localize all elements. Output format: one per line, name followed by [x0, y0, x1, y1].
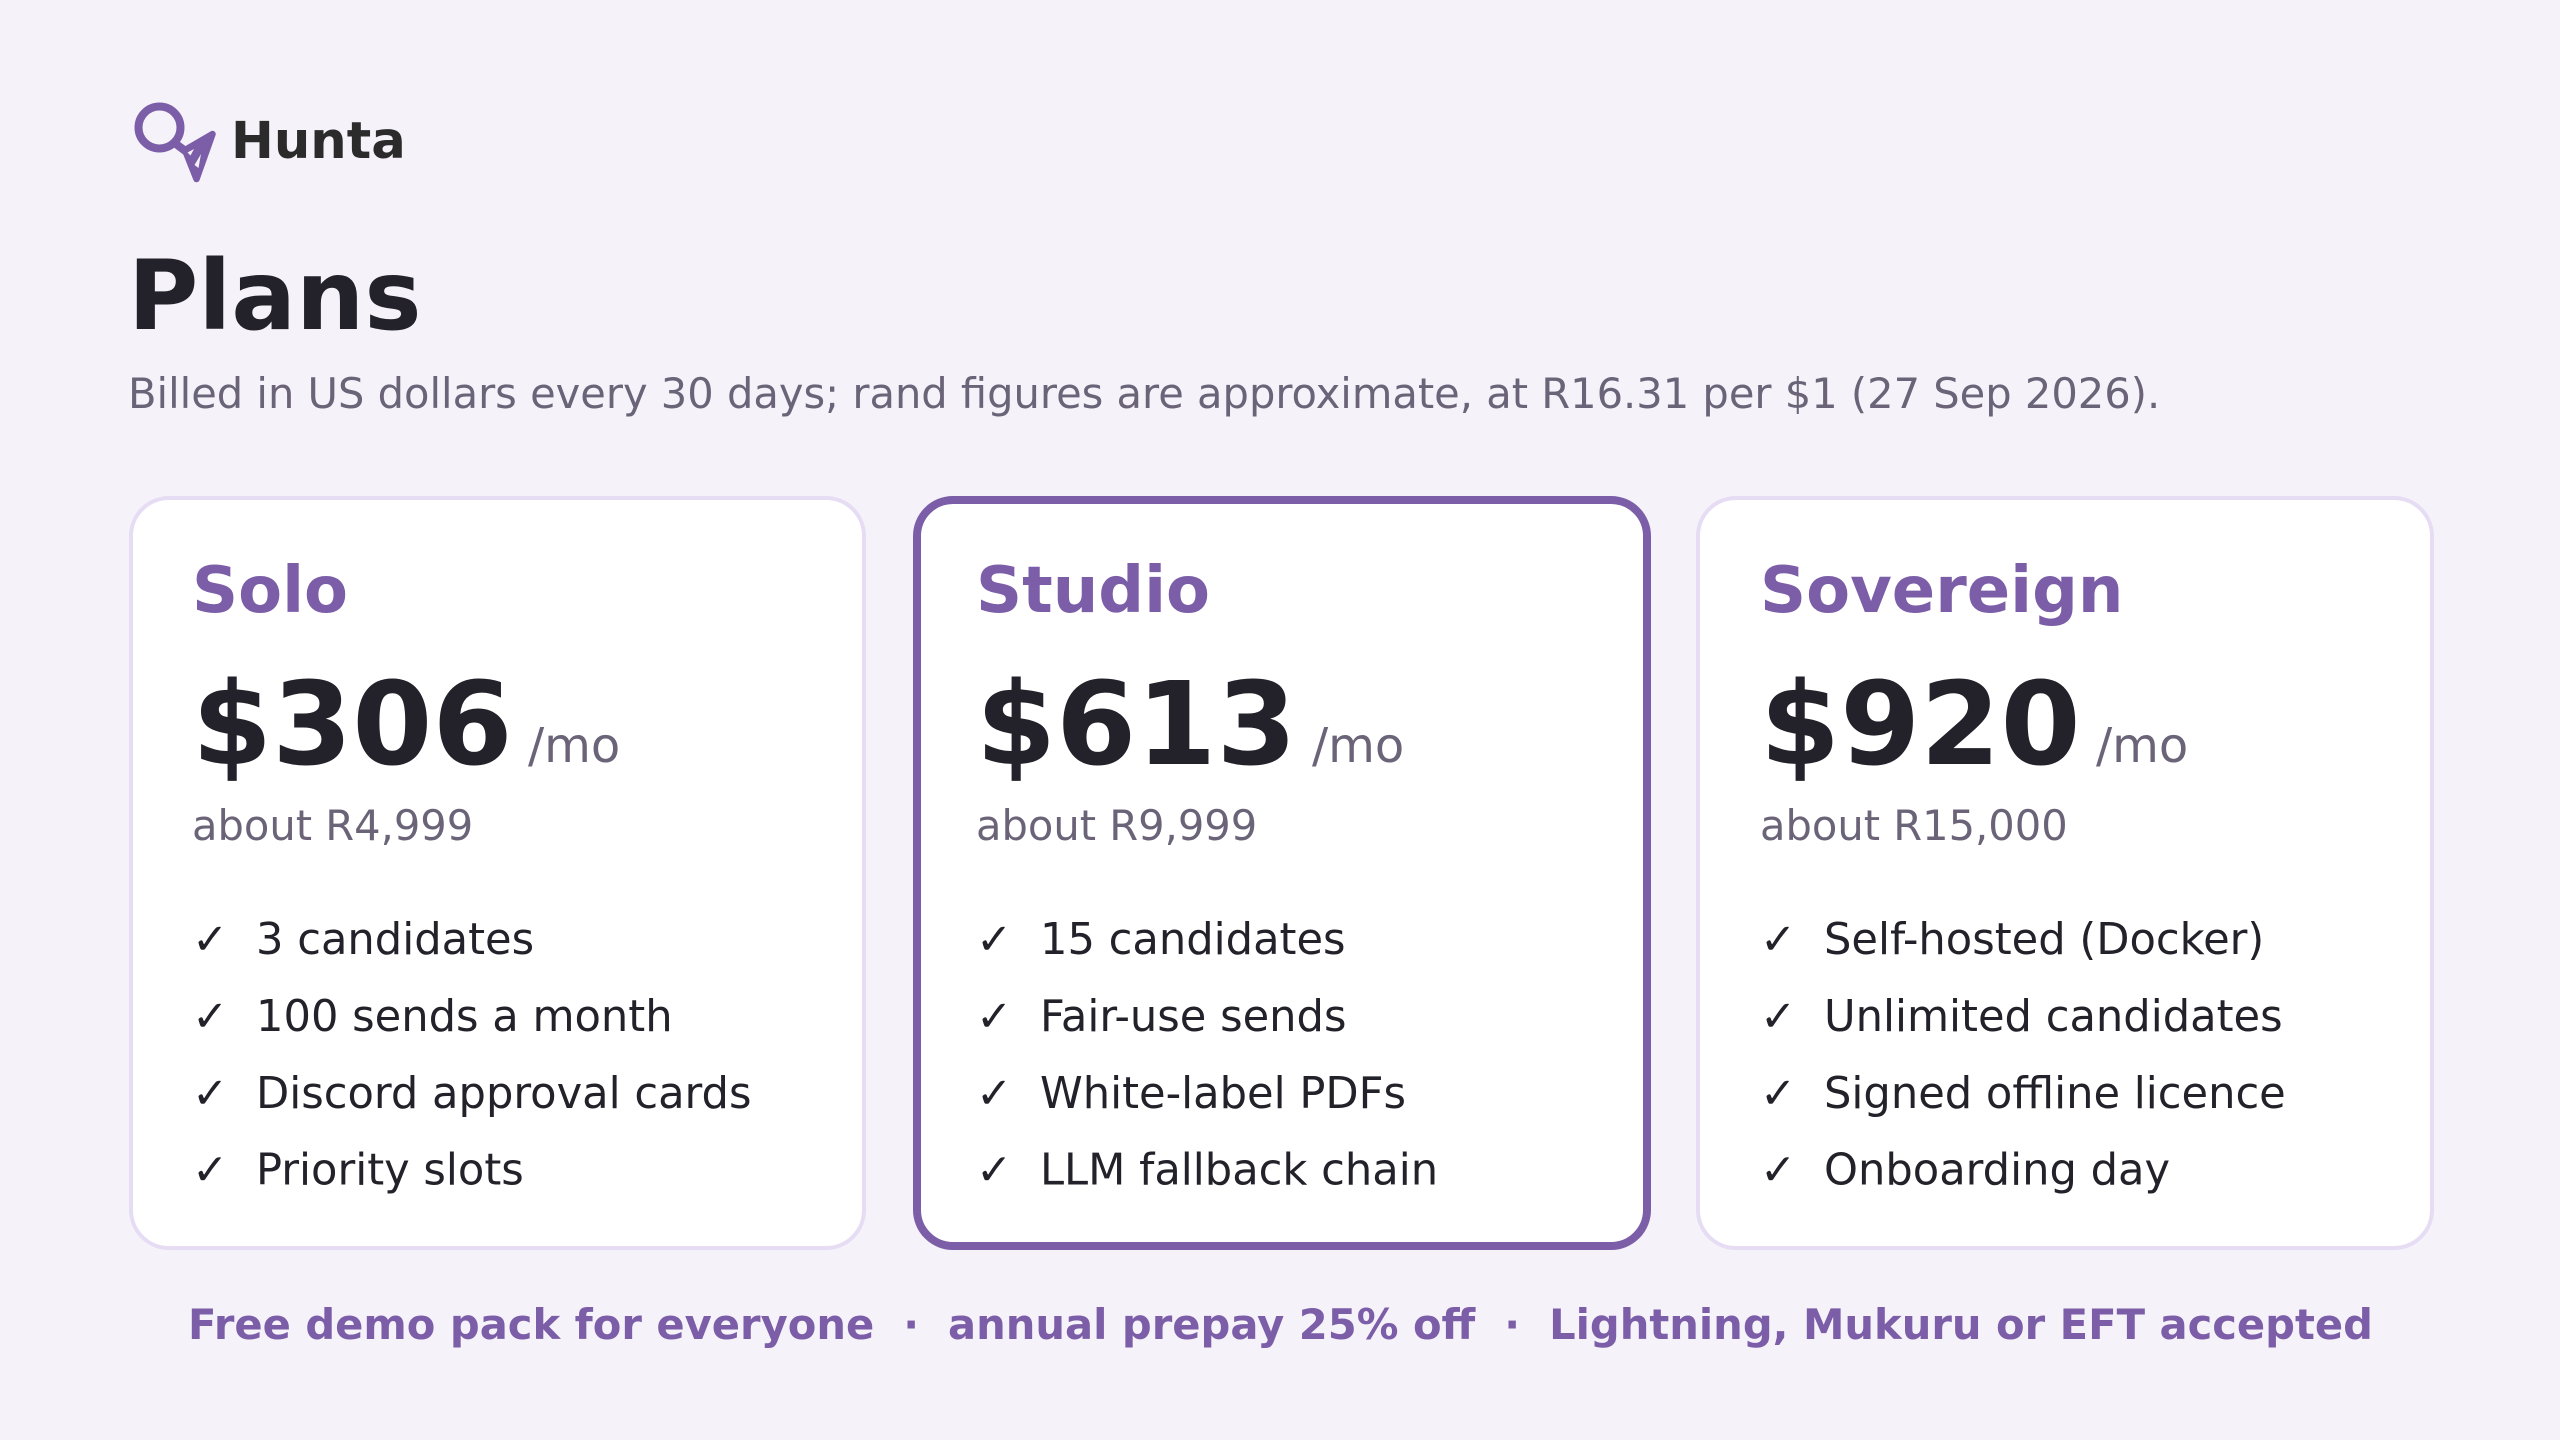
feature list: ✓	[1760, 915, 1796, 965]
panel: Studio plan (highlighted)	[917, 500, 1647, 1246]
feature list: Fair-use sends	[1040, 992, 1346, 1042]
feature list: Unlimited candidates	[1824, 992, 2283, 1042]
feature list: LLM fallback chain	[1040, 1146, 1438, 1196]
feature list: ✓	[1760, 992, 1796, 1042]
feature list	[192, 915, 751, 1196]
feature list: 3 candidates	[256, 915, 534, 965]
per month: /mo	[2096, 718, 2188, 774]
price: $613	[976, 658, 1297, 792]
footer note: Free demo pack for everyone · annual prepay 25% off · Lightning, Mukuru or EFT accepted	[188, 1300, 2373, 1349]
icon: magnifier with arrow	[138, 106, 212, 179]
feature list: Self-hosted (Docker)	[1824, 915, 2264, 965]
feature list: White-label PDFs	[1040, 1069, 1406, 1119]
feature list: ✓	[1760, 1069, 1796, 1119]
feature list: ✓	[192, 1069, 228, 1119]
plan name: Sovereign	[1760, 554, 2123, 628]
wordmark: Hunta	[231, 111, 406, 171]
per month: /mo	[528, 718, 620, 774]
feature list: ✓	[976, 1146, 1012, 1196]
rand equivalent: about R15,000	[1760, 801, 2068, 850]
feature list: ✓	[1760, 1146, 1796, 1196]
feature list: Discord approval cards	[256, 1069, 751, 1119]
per month: /mo	[1312, 718, 1404, 774]
rand equivalent: about R9,999	[976, 801, 1257, 850]
feature list: Signed offline licence	[1824, 1069, 2286, 1119]
price: $306	[192, 658, 513, 792]
feature list: ✓	[976, 992, 1012, 1042]
feature list	[976, 915, 1438, 1196]
price: $920	[1760, 658, 2081, 792]
feature list: ✓	[192, 915, 228, 965]
feature list: ✓	[976, 915, 1012, 965]
logo	[138, 106, 406, 179]
feature list: Onboarding day	[1824, 1146, 2170, 1196]
subtitle: Billed in US dollars every 30 days; rand figures are approximate, at R16.31 per $1 (27 Sep 2026).	[128, 369, 2160, 418]
title: Plans	[128, 240, 422, 352]
feature list: ✓	[192, 992, 228, 1042]
feature list: ✓	[976, 1069, 1012, 1119]
plan name: Studio	[976, 554, 1210, 628]
feature list: 100 sends a month	[256, 992, 673, 1042]
feature list: 15 candidates	[1040, 915, 1346, 965]
feature list: ✓	[192, 1146, 228, 1196]
feature list	[1760, 915, 2286, 1196]
plan name: Solo	[192, 554, 348, 628]
panel: Solo plan	[131, 498, 864, 1248]
panel: Sovereign plan	[1698, 498, 2432, 1248]
rand equivalent: about R4,999	[192, 801, 473, 850]
feature list: Priority slots	[256, 1146, 524, 1196]
